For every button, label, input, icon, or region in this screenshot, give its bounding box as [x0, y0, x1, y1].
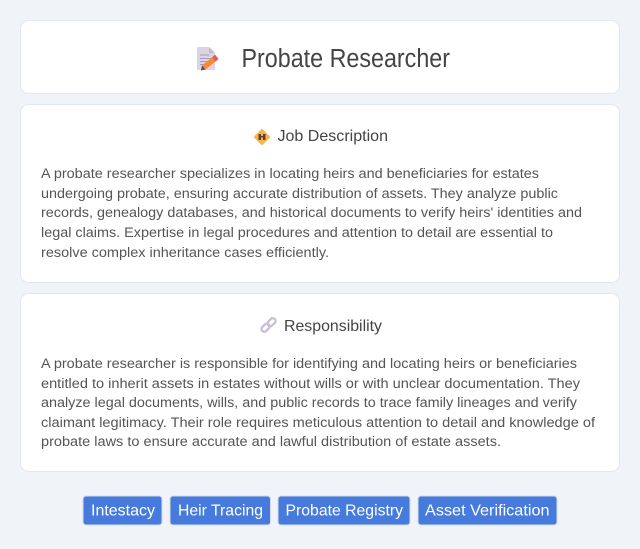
text block: responsibility: analyze legal documents, wills, and public records to trace family lineages and verify: [41, 395, 578, 411]
panel: title card: [20, 20, 620, 94]
tag: heir tracing: [170, 496, 270, 525]
text block: responsibility: entitled to inherit assets in estates without wills or with unclear documentation. They: [41, 376, 581, 392]
text block: responsibility: claimant legitimacy. Their role requires meticulous attention to detail and knowledge of: [41, 415, 595, 431]
tag: asset verification: [418, 496, 557, 525]
tag: heir tracing: Heir Tracing: [178, 502, 263, 520]
text block: responsibility: A probate researcher is responsible for identifying and locating heirs or beneficiaries: [41, 356, 577, 372]
text block: responsibility: probate laws to ensure accurate and lawful distribution of estate assets.: [41, 434, 501, 450]
icon: chain link: [260, 317, 277, 333]
text block: job description: A probate researcher specializes in locating heirs and beneficiaries for estates: [41, 166, 539, 182]
icon: document with pencil: [197, 47, 218, 70]
tag: intestacy: Intestacy: [91, 502, 155, 520]
text block: job description: resolve complex inheritance cases efficiently.: [41, 245, 329, 261]
tag: probate registry: [278, 496, 410, 525]
panel: responsibility: [20, 294, 620, 472]
tag: probate registry: Probate Registry: [286, 502, 403, 520]
text block: job description: legal claims. Expertise in legal procedures and attention to detail are essential to: [41, 225, 553, 241]
icon: orange diamond with people: [254, 128, 270, 146]
text block: job description: records, genealogy databases, and historical documents to verify heirs' identities and: [41, 205, 582, 221]
text block: job description: [41, 166, 582, 261]
text block: job description: undergoing probate, ensuring accurate distribution of assets. They analyze public: [41, 186, 558, 202]
tag row: [83, 496, 557, 525]
panel: job description: [20, 104, 620, 282]
title: Probate Researcher: [242, 45, 450, 73]
text block: responsibility: [41, 356, 595, 450]
heading: responsibility: Responsibility: [284, 318, 382, 335]
heading: job description: Job Description: [278, 128, 388, 145]
tag: asset verification: Asset Verification: [425, 502, 550, 520]
tag: intestacy: [83, 496, 162, 525]
